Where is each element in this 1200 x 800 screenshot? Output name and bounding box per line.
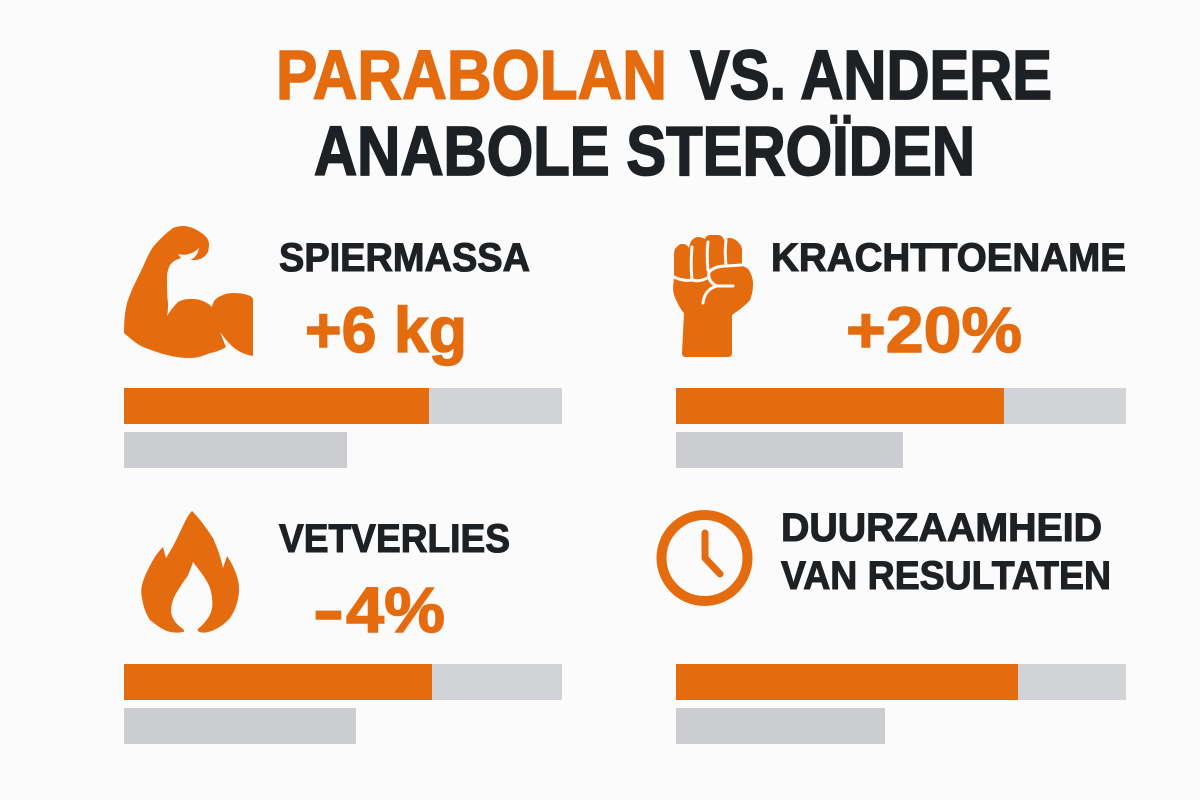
title: PARABOLAN bbox=[276, 36, 667, 114]
icon: fist bbox=[673, 235, 753, 357]
bar: andere vetverlies bbox=[124, 708, 356, 744]
heading: krachttoename: KRACHTTOENAME bbox=[771, 236, 1126, 280]
value: +6 kg: +6 kg bbox=[305, 294, 467, 366]
value: -4%: 4% bbox=[346, 574, 445, 646]
icon: flexed arm bbox=[124, 226, 253, 358]
heading: duurzaamheid van resultaten: DUURZAAMHEID bbox=[781, 506, 1102, 550]
value: +20%: +20% bbox=[846, 294, 1022, 366]
title: ANABOLE STEROÏDEN bbox=[314, 112, 975, 190]
heading: duurzaamheid van resultaten: VAN RESULTATEN bbox=[781, 554, 1111, 598]
panel: duurzaamheid bbox=[662, 506, 1126, 744]
bar: parabolan spiermassa bbox=[124, 388, 562, 424]
panel: vetverlies bbox=[124, 511, 562, 744]
title bbox=[276, 36, 1052, 190]
panel: krachttoename bbox=[673, 235, 1126, 468]
heading: duurzaamheid van resultaten bbox=[781, 506, 1111, 598]
value: -4%: - bbox=[313, 574, 344, 646]
icon: clock bbox=[662, 515, 748, 601]
panel: spiermassa bbox=[124, 226, 562, 468]
heading: vetverlies: VETVERLIES bbox=[279, 517, 510, 561]
heading: spiermassa: SPIERMASSA bbox=[279, 236, 530, 280]
bar: parabolan duurzaamheid bbox=[676, 664, 1126, 700]
icon: flame bbox=[141, 511, 239, 633]
bar: andere kracht bbox=[676, 432, 903, 468]
title: VS. ANDERE bbox=[690, 36, 1052, 114]
bar: andere duurzaamheid bbox=[676, 708, 885, 744]
bar: parabolan vetverlies bbox=[124, 664, 562, 700]
bar: andere spiermassa bbox=[124, 432, 347, 468]
bar: parabolan kracht bbox=[676, 388, 1126, 424]
